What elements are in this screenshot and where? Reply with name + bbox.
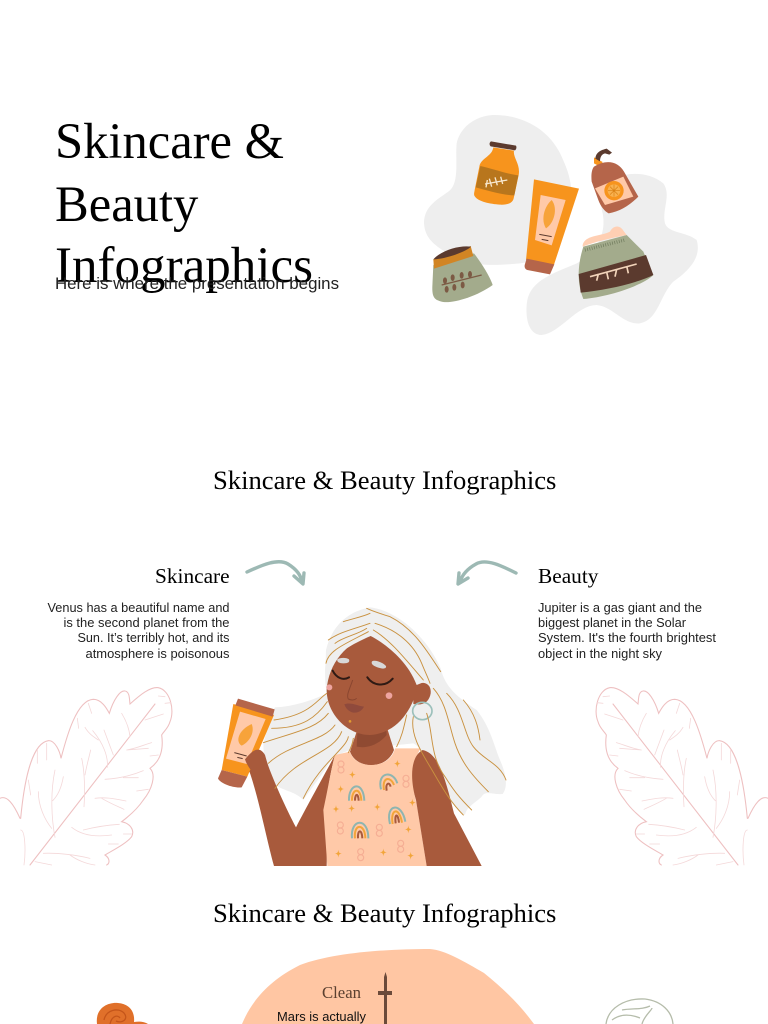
text: beauty description: Jupiter is a gas giant and the	[538, 601, 702, 615]
title: Skincare &	[55, 113, 284, 169]
heading: clean: Clean	[322, 983, 361, 1002]
hair back	[263, 607, 506, 815]
text: skincare description: Sun. It’s terribly hot, and its	[78, 631, 229, 645]
jar: orange	[474, 141, 519, 205]
ear	[413, 683, 431, 704]
arrow: right	[458, 562, 516, 584]
text: skincare description: is the second planet from the	[64, 616, 230, 630]
hand fingers	[245, 750, 268, 777]
leaf: left	[0, 688, 172, 865]
text: beauty description: object in the night sky	[538, 647, 663, 661]
text: beauty description	[538, 601, 717, 661]
dress pattern	[332, 760, 416, 861]
icon: orange hair bun	[97, 1003, 148, 1024]
text: beauty description: System. It's the fourth brightest	[538, 631, 717, 645]
heading: skincare: Skincare	[155, 564, 230, 588]
leaf: right	[596, 688, 768, 865]
text: skincare description	[48, 601, 230, 661]
text: clean description: Mars is actually	[277, 1010, 367, 1024]
tube: orange	[525, 179, 579, 274]
earring	[413, 702, 432, 720]
title: Infographics	[55, 237, 313, 293]
pump bottle	[591, 149, 638, 213]
face	[327, 635, 418, 735]
block: skincare	[48, 564, 230, 661]
text: skincare description: Venus has a beautiful name and	[48, 601, 230, 615]
right arm	[412, 750, 482, 866]
block: beauty	[538, 564, 717, 661]
jar: small green	[432, 246, 493, 302]
illustration: skincare products	[424, 115, 698, 335]
left arm and hand	[245, 750, 335, 866]
text: skincare description: atmosphere is poisonous	[86, 647, 229, 661]
hair strands	[263, 608, 506, 815]
title	[55, 113, 313, 293]
section heading 1: Skincare & Beauty Infographics	[213, 465, 556, 495]
icon: outlined hair bun	[606, 999, 673, 1024]
heading: beauty: Beauty	[538, 564, 599, 588]
timeline stem	[378, 972, 392, 1024]
hair front	[325, 607, 437, 685]
background blobs	[424, 115, 698, 335]
face details	[326, 658, 393, 723]
panel: clean blob	[242, 949, 534, 1024]
dress	[323, 748, 427, 866]
jar: large green	[579, 227, 653, 299]
illustration: woman with tube	[218, 607, 506, 866]
title: Beauty	[55, 176, 199, 232]
arrow: left	[247, 562, 304, 584]
text: beauty description: biggest planet in the Solar	[538, 616, 686, 630]
subtitle: Here is where the presentation begins	[55, 274, 339, 293]
section heading 2: Skincare & Beauty Infographics	[213, 898, 556, 928]
neck	[350, 727, 394, 765]
tube held	[218, 699, 275, 787]
